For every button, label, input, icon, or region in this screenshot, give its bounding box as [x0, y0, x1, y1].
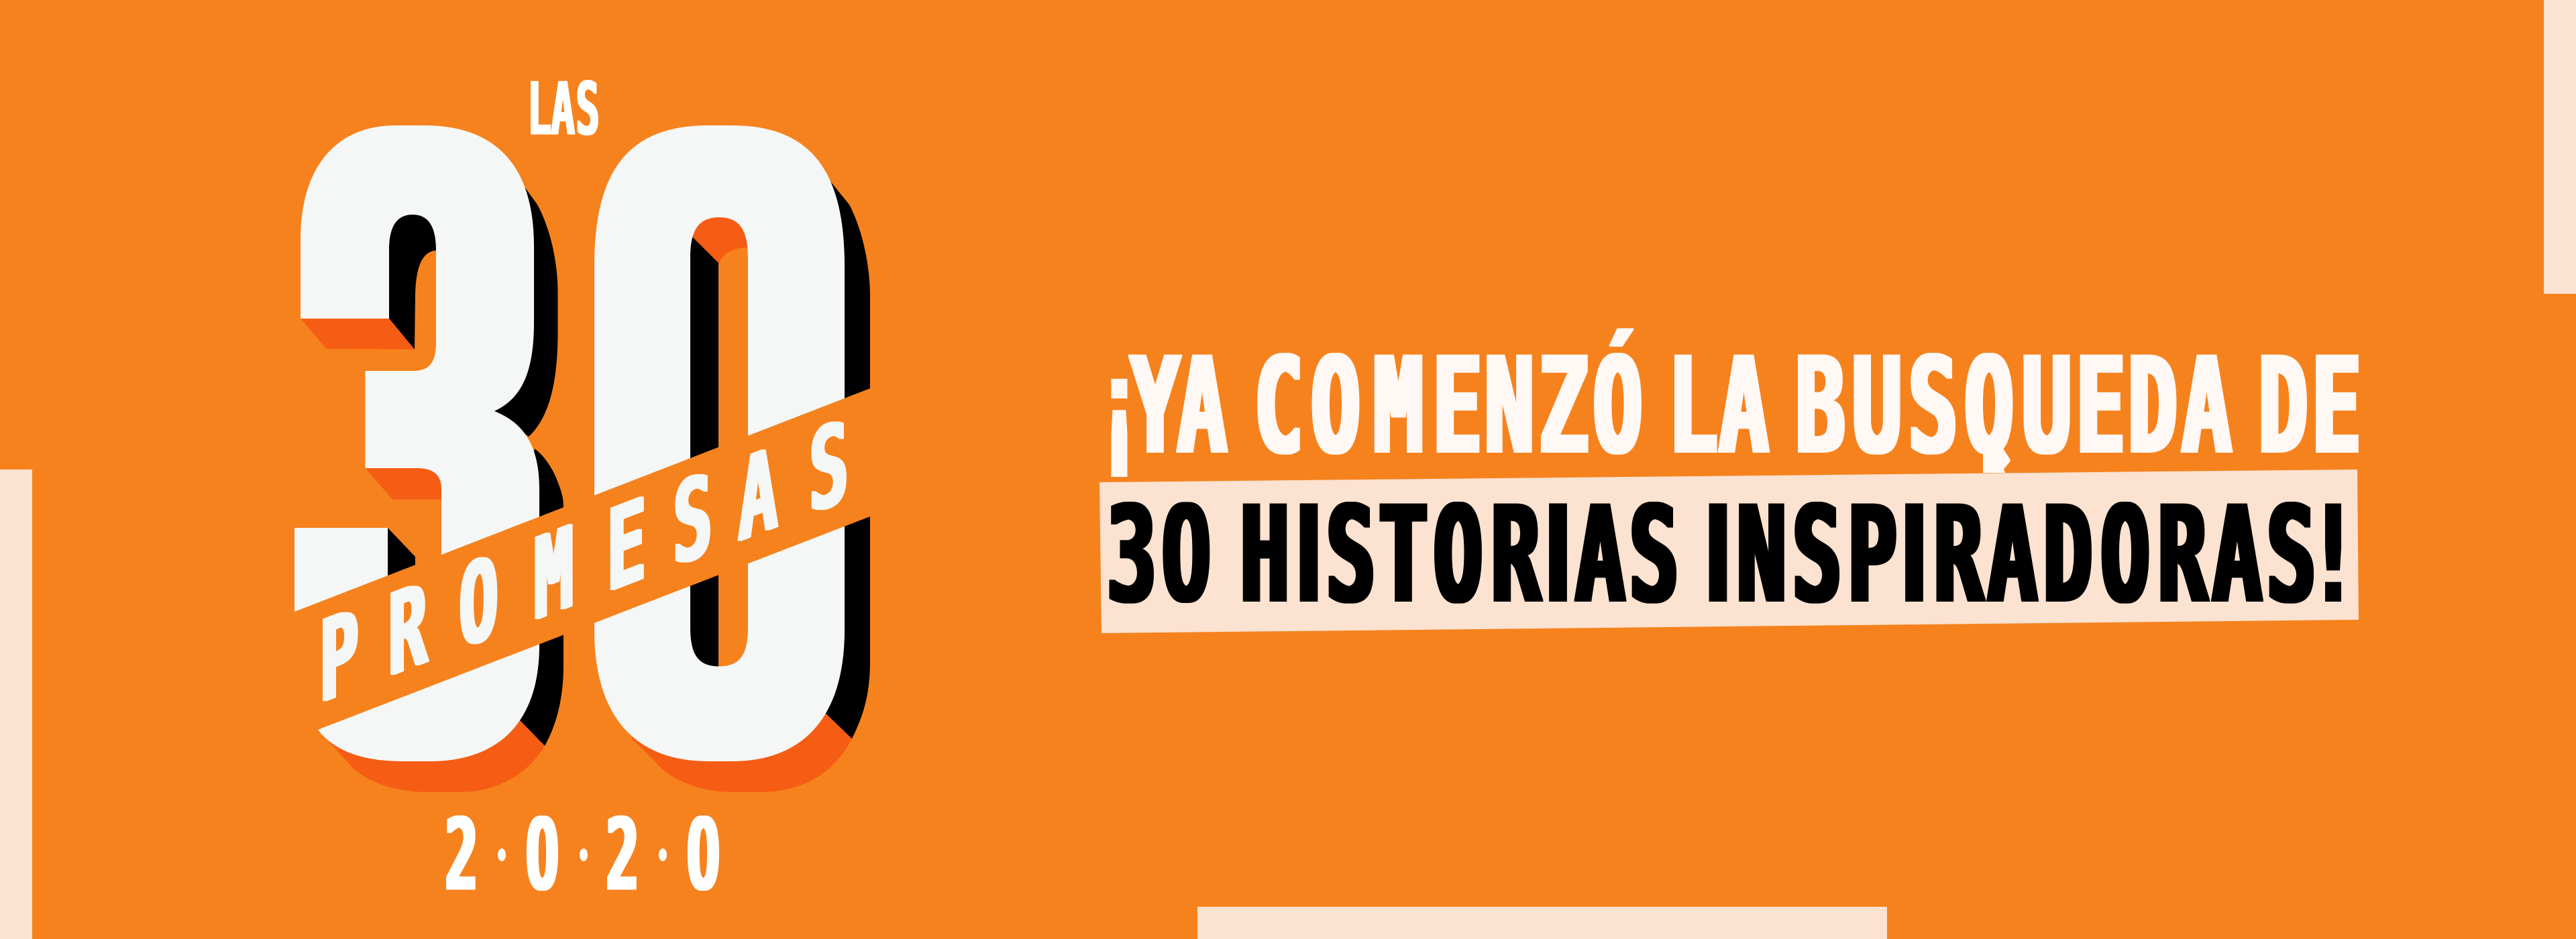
digit 0 face — [594, 125, 845, 761]
headline line 1: ¡YA COMENZÓ LA BUSQUEDA DE — [1095, 329, 2361, 484]
digit 3 extrusion — [301, 185, 564, 792]
diagonal band — [282, 385, 879, 744]
Q tail — [1983, 449, 2005, 473]
headline block — [1095, 329, 2361, 633]
digit 0 extrusion — [631, 176, 870, 792]
highlight box — [1099, 470, 2359, 633]
heading: LAS: LAS — [527, 67, 600, 152]
headline line 2: 30 HISTORIAS INSPIRADORAS! — [1107, 474, 2358, 632]
logo: las 30 promesas 2020 — [282, 67, 879, 914]
year: 2020: 2 0 2 0 — [445, 793, 720, 914]
digit 3 face — [294, 125, 539, 761]
band text: PROMESAS: PROMESAS — [319, 395, 849, 729]
